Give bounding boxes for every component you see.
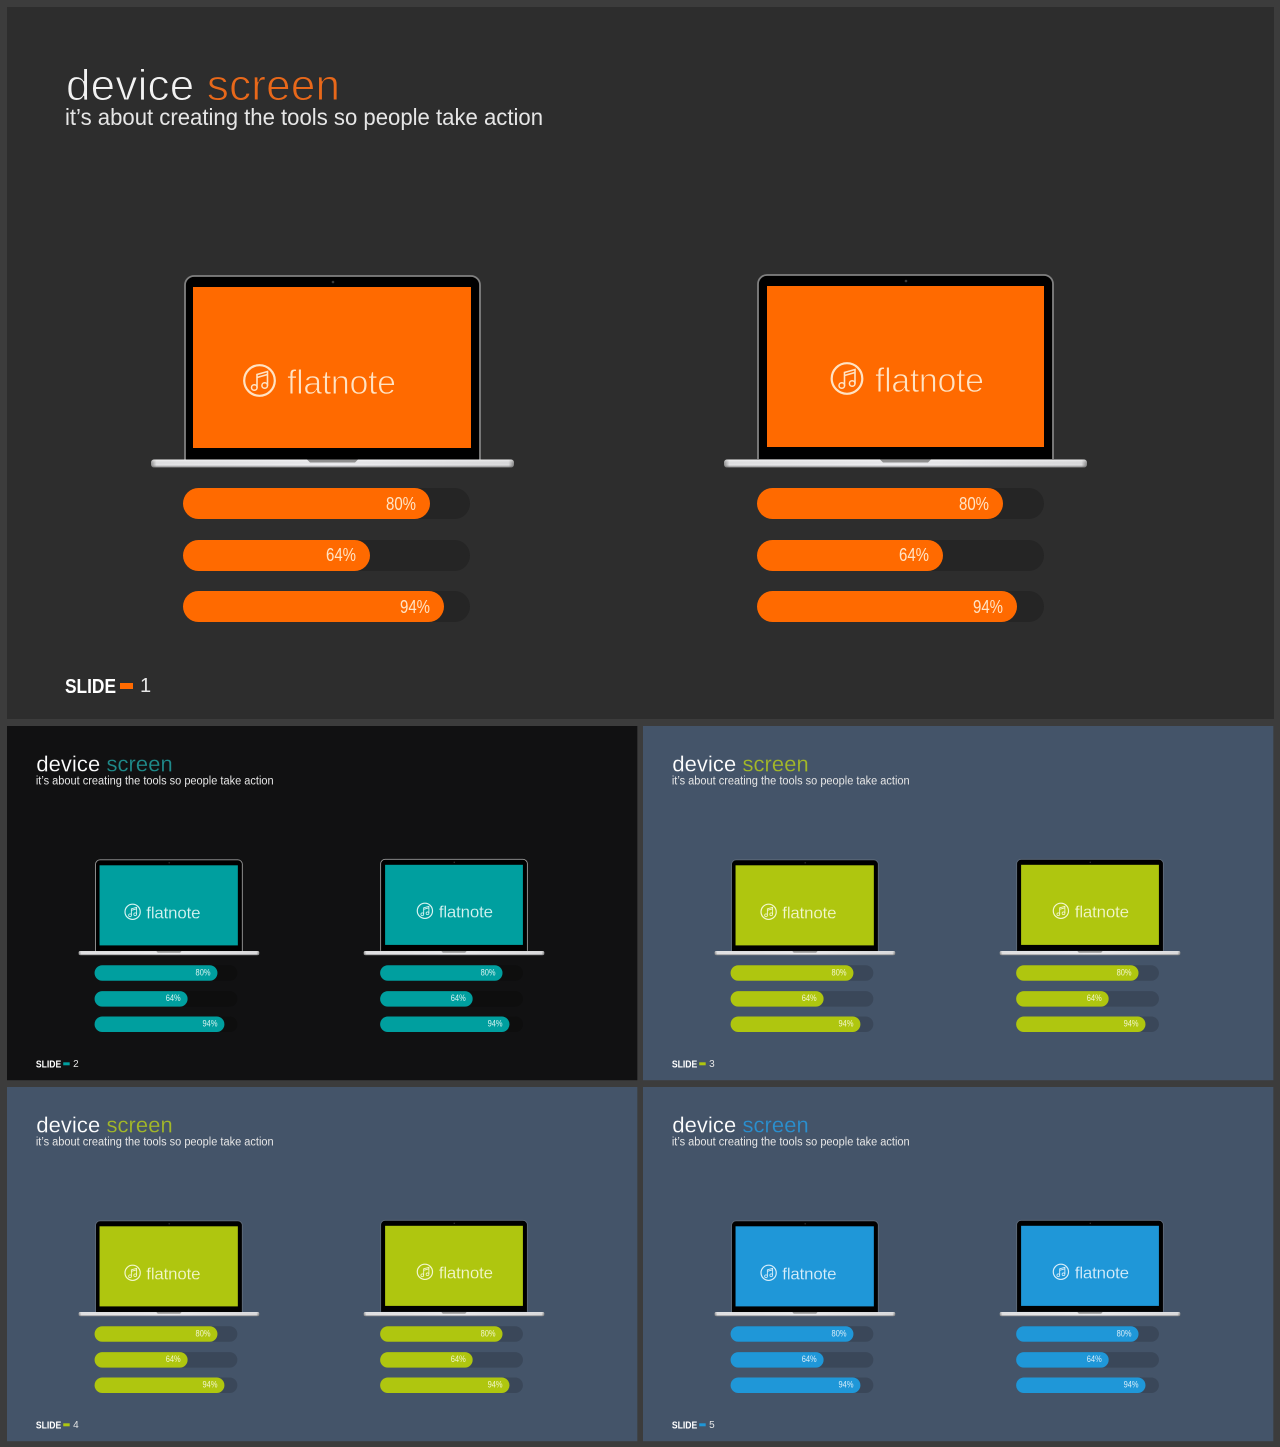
subtitle: it’s about creating the tools so people take action — [36, 775, 274, 788]
slide number: SLIDE — [36, 1420, 62, 1431]
logo text: flatnote — [439, 903, 493, 922]
bar 94% right — [380, 1017, 523, 1032]
bar 94% left — [731, 1378, 873, 1393]
subtitle: it’s about creating the tools so people take action — [36, 1136, 274, 1149]
bar 64% left: 64% — [802, 1354, 817, 1364]
screen — [1021, 865, 1159, 945]
logo icon — [244, 365, 275, 396]
bar 80% left: 80% — [832, 1328, 847, 1338]
logo icon — [1053, 903, 1069, 918]
logo text: flatnote — [782, 1265, 837, 1284]
bar 64% left — [95, 1352, 237, 1368]
laptop right — [724, 275, 1087, 468]
laptop base — [1000, 951, 1180, 955]
logo icon — [125, 1265, 140, 1280]
bar 64% right: 64% — [451, 1354, 466, 1364]
laptop left — [79, 1221, 259, 1316]
subtitle: it’s about creating the tools so people take action — [672, 1136, 910, 1149]
bar 94% left: 94% — [839, 1019, 853, 1029]
panel: slide 5 — [643, 1087, 1273, 1441]
slide number: SLIDE — [672, 1059, 698, 1070]
logo icon — [1053, 1264, 1069, 1279]
laptop base — [715, 1312, 895, 1316]
laptop right — [1000, 859, 1180, 955]
laptop left — [715, 1221, 895, 1316]
bar 80% right: 80% — [1117, 967, 1132, 977]
bar 94% right — [380, 1378, 523, 1393]
bar 94% right: 94% — [1124, 1019, 1139, 1029]
logo text: flatnote — [875, 362, 984, 400]
bar 94% right — [1016, 1378, 1159, 1393]
logo text: flatnote — [782, 904, 837, 923]
laptop left — [715, 860, 895, 955]
logo text: flatnote — [287, 364, 396, 402]
slide number — [672, 1420, 715, 1431]
logo text: flatnote — [146, 1265, 201, 1284]
bar 80% right — [380, 1326, 523, 1342]
logo text: flatnote — [439, 1264, 493, 1283]
panel: slide 1 — [7, 7, 1274, 719]
laptop base — [715, 951, 895, 955]
slide number: 5 — [709, 1420, 715, 1431]
bar 64% right — [757, 540, 1044, 571]
laptop right — [1000, 1220, 1180, 1316]
bar 94% left: 94% — [203, 1380, 217, 1390]
bar 80% right: 80% — [959, 494, 989, 514]
bar 64% left — [731, 991, 873, 1007]
bar 64% right — [1016, 991, 1159, 1007]
bar 80% left: 80% — [386, 494, 416, 514]
bar 64% right: 64% — [451, 993, 466, 1003]
bar 64% right: 64% — [1087, 1354, 1102, 1364]
bar 94% right: 94% — [488, 1019, 503, 1029]
laptop base — [1000, 1312, 1180, 1316]
slide number: 3 — [709, 1059, 715, 1070]
logo icon — [761, 904, 776, 919]
title: device screen — [672, 751, 809, 776]
slide number — [672, 1059, 715, 1070]
bar 64% right: 64% — [899, 545, 929, 565]
screen — [100, 865, 238, 945]
bar 80% left — [183, 488, 470, 519]
panel: slide 2 — [7, 726, 637, 1080]
slide number: SLIDE — [65, 676, 116, 698]
laptop base — [79, 951, 259, 955]
bar 64% left: 64% — [326, 545, 356, 565]
screen — [767, 286, 1044, 447]
bar 94% left: 94% — [400, 597, 430, 617]
logo text: flatnote — [1075, 903, 1129, 922]
laptop base — [364, 951, 544, 955]
slide number: SLIDE — [36, 1059, 62, 1070]
slide number: SLIDE — [672, 1420, 698, 1431]
bar 80% right: 80% — [481, 967, 496, 977]
bar 80% right — [380, 965, 523, 981]
bar 94% left: 94% — [839, 1380, 853, 1390]
bar 64% left — [731, 1352, 873, 1368]
subtitle: it’s about creating the tools so people take action — [65, 104, 543, 130]
screen — [100, 1226, 238, 1306]
slide number: 1 — [140, 675, 151, 697]
bar 80% left: 80% — [832, 967, 847, 977]
laptop base — [79, 1312, 259, 1316]
screen — [736, 1226, 874, 1306]
logo text: flatnote — [146, 904, 201, 923]
bar 80% right — [1016, 965, 1159, 981]
slide number — [36, 1420, 79, 1431]
laptop left — [79, 860, 259, 955]
logo icon — [125, 904, 140, 919]
logo icon — [417, 1264, 433, 1279]
bar 94% right: 94% — [1124, 1380, 1139, 1390]
bar 94% right — [757, 591, 1044, 622]
laptop left — [151, 276, 514, 468]
bar 64% right: 64% — [1087, 993, 1102, 1003]
bar 80% left — [731, 965, 873, 981]
bar 94% left: 94% — [203, 1019, 217, 1029]
bar 94% left — [95, 1378, 237, 1393]
screen — [1021, 1226, 1159, 1306]
laptop right — [364, 1220, 544, 1316]
bar 80% right — [1016, 1326, 1159, 1342]
bar 80% left — [95, 1326, 237, 1342]
panel: slide 3 — [643, 726, 1273, 1080]
bar 80% left: 80% — [196, 967, 211, 977]
bar 80% left — [95, 965, 237, 981]
bar 64% left — [95, 991, 237, 1007]
panel: slide 4 — [7, 1087, 637, 1441]
subtitle: it’s about creating the tools so people take action — [672, 775, 910, 788]
slide number: 2 — [73, 1059, 79, 1070]
bar 64% right — [380, 1352, 523, 1368]
logo icon — [417, 903, 433, 918]
bar 64% left: 64% — [802, 993, 817, 1003]
screen — [385, 865, 523, 945]
bar 80% right: 80% — [481, 1328, 496, 1338]
screen — [193, 287, 471, 448]
bar 80% right: 80% — [1117, 1328, 1132, 1338]
bar 80% right — [757, 488, 1044, 519]
bar 64% left — [183, 540, 470, 571]
bar 94% left — [183, 591, 470, 622]
screen — [385, 1226, 523, 1306]
bar 64% right — [1016, 1352, 1159, 1368]
bar 64% right — [380, 991, 523, 1007]
slide number — [36, 1059, 79, 1070]
bar 94% right: 94% — [973, 597, 1003, 617]
screen — [736, 865, 874, 945]
laptop right — [364, 859, 544, 955]
bar 80% left: 80% — [196, 1328, 211, 1338]
logo text: flatnote — [1075, 1264, 1129, 1283]
slide number — [65, 675, 151, 698]
bar 94% left — [731, 1017, 873, 1032]
laptop base — [724, 460, 1087, 468]
logo icon — [832, 363, 862, 394]
bar 94% right: 94% — [488, 1380, 503, 1390]
bar 64% left: 64% — [166, 993, 181, 1003]
bar 94% left — [95, 1017, 237, 1032]
laptop base — [151, 460, 514, 468]
title: device screen — [36, 751, 173, 776]
bar 64% left: 64% — [166, 1354, 181, 1364]
title: device screen — [66, 61, 340, 110]
title: device screen — [672, 1112, 809, 1137]
logo icon — [761, 1265, 776, 1280]
slide number: 4 — [73, 1420, 79, 1431]
laptop base — [364, 1312, 544, 1316]
title: device screen — [36, 1112, 173, 1137]
bar 94% right — [1016, 1017, 1159, 1032]
bar 80% left — [731, 1326, 873, 1342]
